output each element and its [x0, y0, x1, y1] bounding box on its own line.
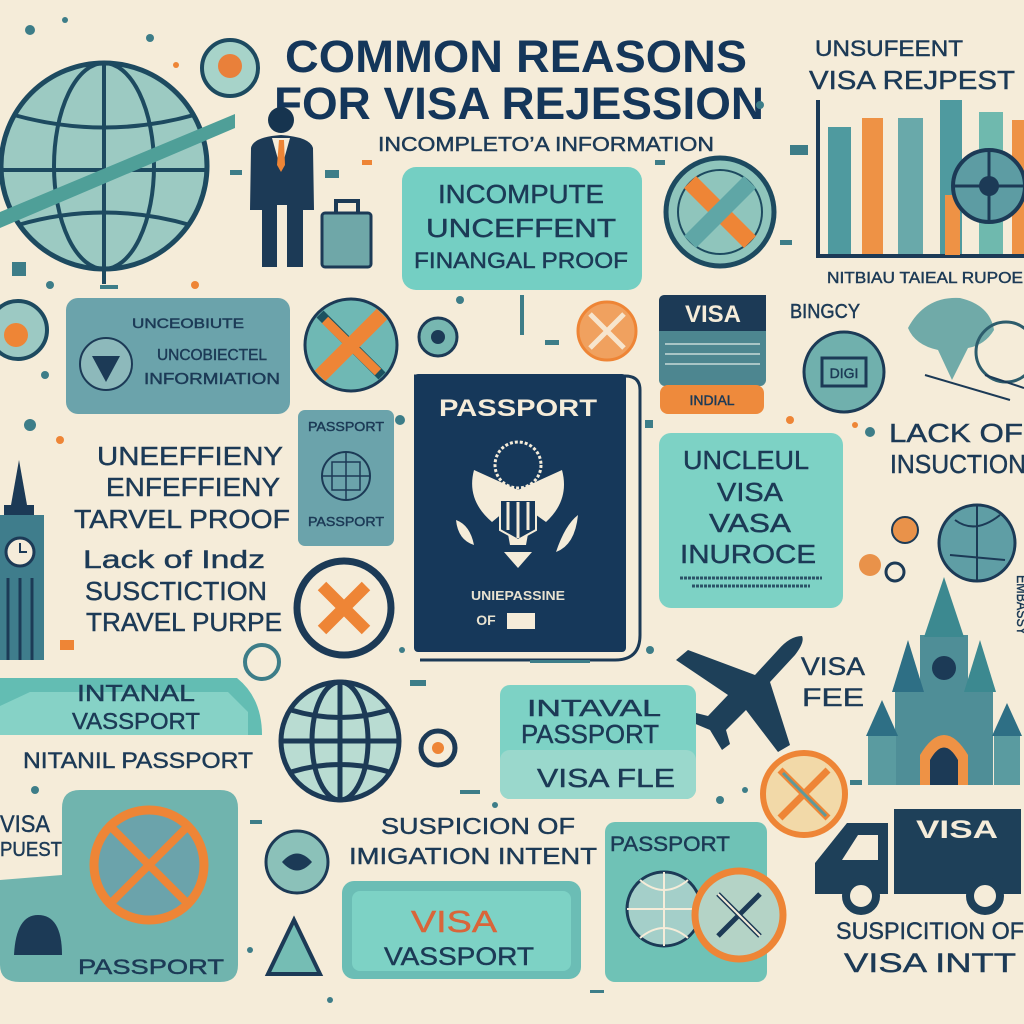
panel: passport ban — [0, 790, 238, 982]
heading: suspicion travel purpose — [83, 546, 282, 637]
bar chart — [818, 100, 1024, 256]
caption: nitanil passport: NITANIL PASSPORT — [23, 748, 253, 773]
panel: passport visa fee — [500, 685, 696, 799]
icon: clock tower — [0, 460, 44, 660]
heading: suspicion of visa intent — [836, 918, 1024, 978]
heading: travel proof: ENFEFFIENY — [106, 472, 280, 502]
icon: crossed circle top — [666, 158, 774, 266]
heading: travel proof: UNEEFFIENY — [97, 441, 283, 471]
panel: intanal vassport: INTANAL — [77, 680, 195, 706]
icon: panel badge — [80, 338, 132, 390]
panel: visa insurance: UNCLEUL — [683, 445, 809, 475]
icon: castle — [866, 577, 1022, 785]
panel: small passport: PASSPORT — [308, 514, 384, 529]
heading: visa fee: VISA — [801, 653, 865, 681]
icon: warning triangle — [268, 920, 320, 974]
panel: intanal vassport: VASSPORT — [72, 708, 200, 734]
panel: passport ban card — [605, 822, 783, 982]
panel: visa card: VISA — [685, 301, 741, 328]
icon: orange gear cluster — [859, 517, 918, 581]
icon: eye badge — [421, 731, 455, 765]
icon: stamp circle — [804, 332, 884, 412]
title: FOR VISA REJESSION — [274, 78, 764, 129]
heading: travel proof: TARVEL PROOF — [74, 504, 290, 534]
heading: visa fee: FEE — [802, 684, 864, 712]
panel: financial proof — [402, 167, 642, 290]
icon: large globe — [0, 63, 235, 284]
panel: intanal vassport — [0, 678, 262, 735]
icon: stamp circle: DIGI — [830, 365, 858, 381]
panel: financial proof: UNCEFFENT — [426, 213, 616, 243]
label: uncheck: BINGCY — [790, 301, 860, 323]
heading: suspicion of immigration intent: IMIGATION INTENT — [349, 843, 597, 869]
icon: map shape — [908, 298, 1024, 400]
panel: uncorrected information: INFORMIATION — [144, 371, 280, 388]
heading: suspicion of immigration intent: SUSPICION OF — [381, 813, 575, 839]
heading: suspicion travel purpose: Lack of Indz — [83, 546, 265, 574]
panel: visa card — [659, 295, 766, 414]
icon: small face badge — [266, 831, 328, 893]
heading: suspicion of visa intent: VISA INTT — [844, 948, 1016, 978]
icon: orange x circle — [297, 561, 391, 655]
panel: financial proof: INCOMPUTE — [438, 179, 604, 209]
label: visa request — [0, 811, 62, 861]
icon: silhouette — [14, 915, 62, 955]
label: visa request: PUEST — [0, 839, 62, 861]
heading: suspicion travel purpose: SUSCTICTION — [85, 576, 267, 606]
panel: uncorrected information: UNCEOBIUTE — [132, 315, 244, 331]
panel: passport visa fee: VISA FLE — [537, 763, 675, 793]
heading: suspicion travel purpose: TRAVEL PURPE — [86, 607, 282, 637]
panel: uncorrected information: UNCOBIECTEL — [157, 347, 267, 364]
heading: unsufficient visa request: VISA REJPEST — [809, 65, 1015, 95]
icon: delivery truck: VISA — [916, 816, 998, 844]
panel: financial proof: FINANGAL PROOF — [414, 248, 628, 273]
passport: UNIEPASSINE — [471, 588, 565, 603]
panel: visa vassport: VISA — [411, 904, 497, 939]
panel: passport ban card: PASSPORT — [610, 833, 730, 856]
icon: airplane — [676, 636, 803, 752]
panel: uncorrected information — [66, 298, 290, 414]
panel: visa insurance: VISA — [717, 477, 784, 507]
heading: lack of instruction: LACK OF — [889, 418, 1023, 448]
passport: PASSPORT — [439, 395, 597, 422]
icon: small circle badge — [419, 318, 457, 356]
icon: crossed circle left — [305, 299, 397, 391]
passport — [414, 374, 640, 660]
heading: unsufficient visa request — [809, 36, 1015, 95]
icon: globe center — [281, 682, 399, 800]
icon: businessman — [250, 107, 314, 267]
passport: OF — [476, 612, 496, 628]
title: COMMON REASONS — [285, 31, 747, 82]
icon: orange ban right — [763, 753, 845, 835]
icon: right globe — [939, 505, 1015, 581]
panel: passport visa fee: PASSPORT — [521, 719, 659, 749]
icon: delivery truck — [815, 809, 1021, 911]
heading: suspicion of visa intent: SUSPICITION OF — [836, 918, 1024, 945]
panel: visa insurance — [659, 433, 843, 608]
heading: visa fee — [801, 653, 865, 712]
panel: visa vassport — [342, 881, 581, 979]
panel: visa vassport: VASSPORT — [384, 943, 534, 971]
heading: suspicion of immigration intent — [349, 813, 597, 869]
icon: suitcase — [322, 201, 371, 267]
label: visa request: VISA — [0, 811, 50, 838]
subtitle: incomplete information: INCOMPLETO’A INFORMATION — [378, 134, 714, 156]
heading: travel proof — [74, 441, 290, 534]
panel: passport visa fee: INTAVAL — [527, 695, 661, 721]
panel: small passport: PASSPORT — [308, 419, 384, 434]
icon: left badge — [0, 301, 47, 359]
panel: passport ban: PASSPORT — [78, 956, 224, 979]
icon: orange crossed circle — [578, 302, 636, 360]
heading: lack of instruction — [889, 418, 1024, 479]
panel: visa card: INDIAL — [689, 392, 735, 408]
panel: small passport — [298, 410, 394, 546]
panel: visa insurance: VASA — [709, 508, 792, 538]
caption: travel purpose: NITBIAU TAIEAL RUPOE — [827, 270, 1023, 287]
icon: eagle emblem — [456, 442, 578, 568]
heading: unsufficient visa request: UNSUFEENT — [815, 36, 963, 61]
panel: visa insurance: INUROCE — [680, 539, 816, 569]
icon: top badge — [202, 40, 258, 96]
title — [274, 31, 764, 129]
